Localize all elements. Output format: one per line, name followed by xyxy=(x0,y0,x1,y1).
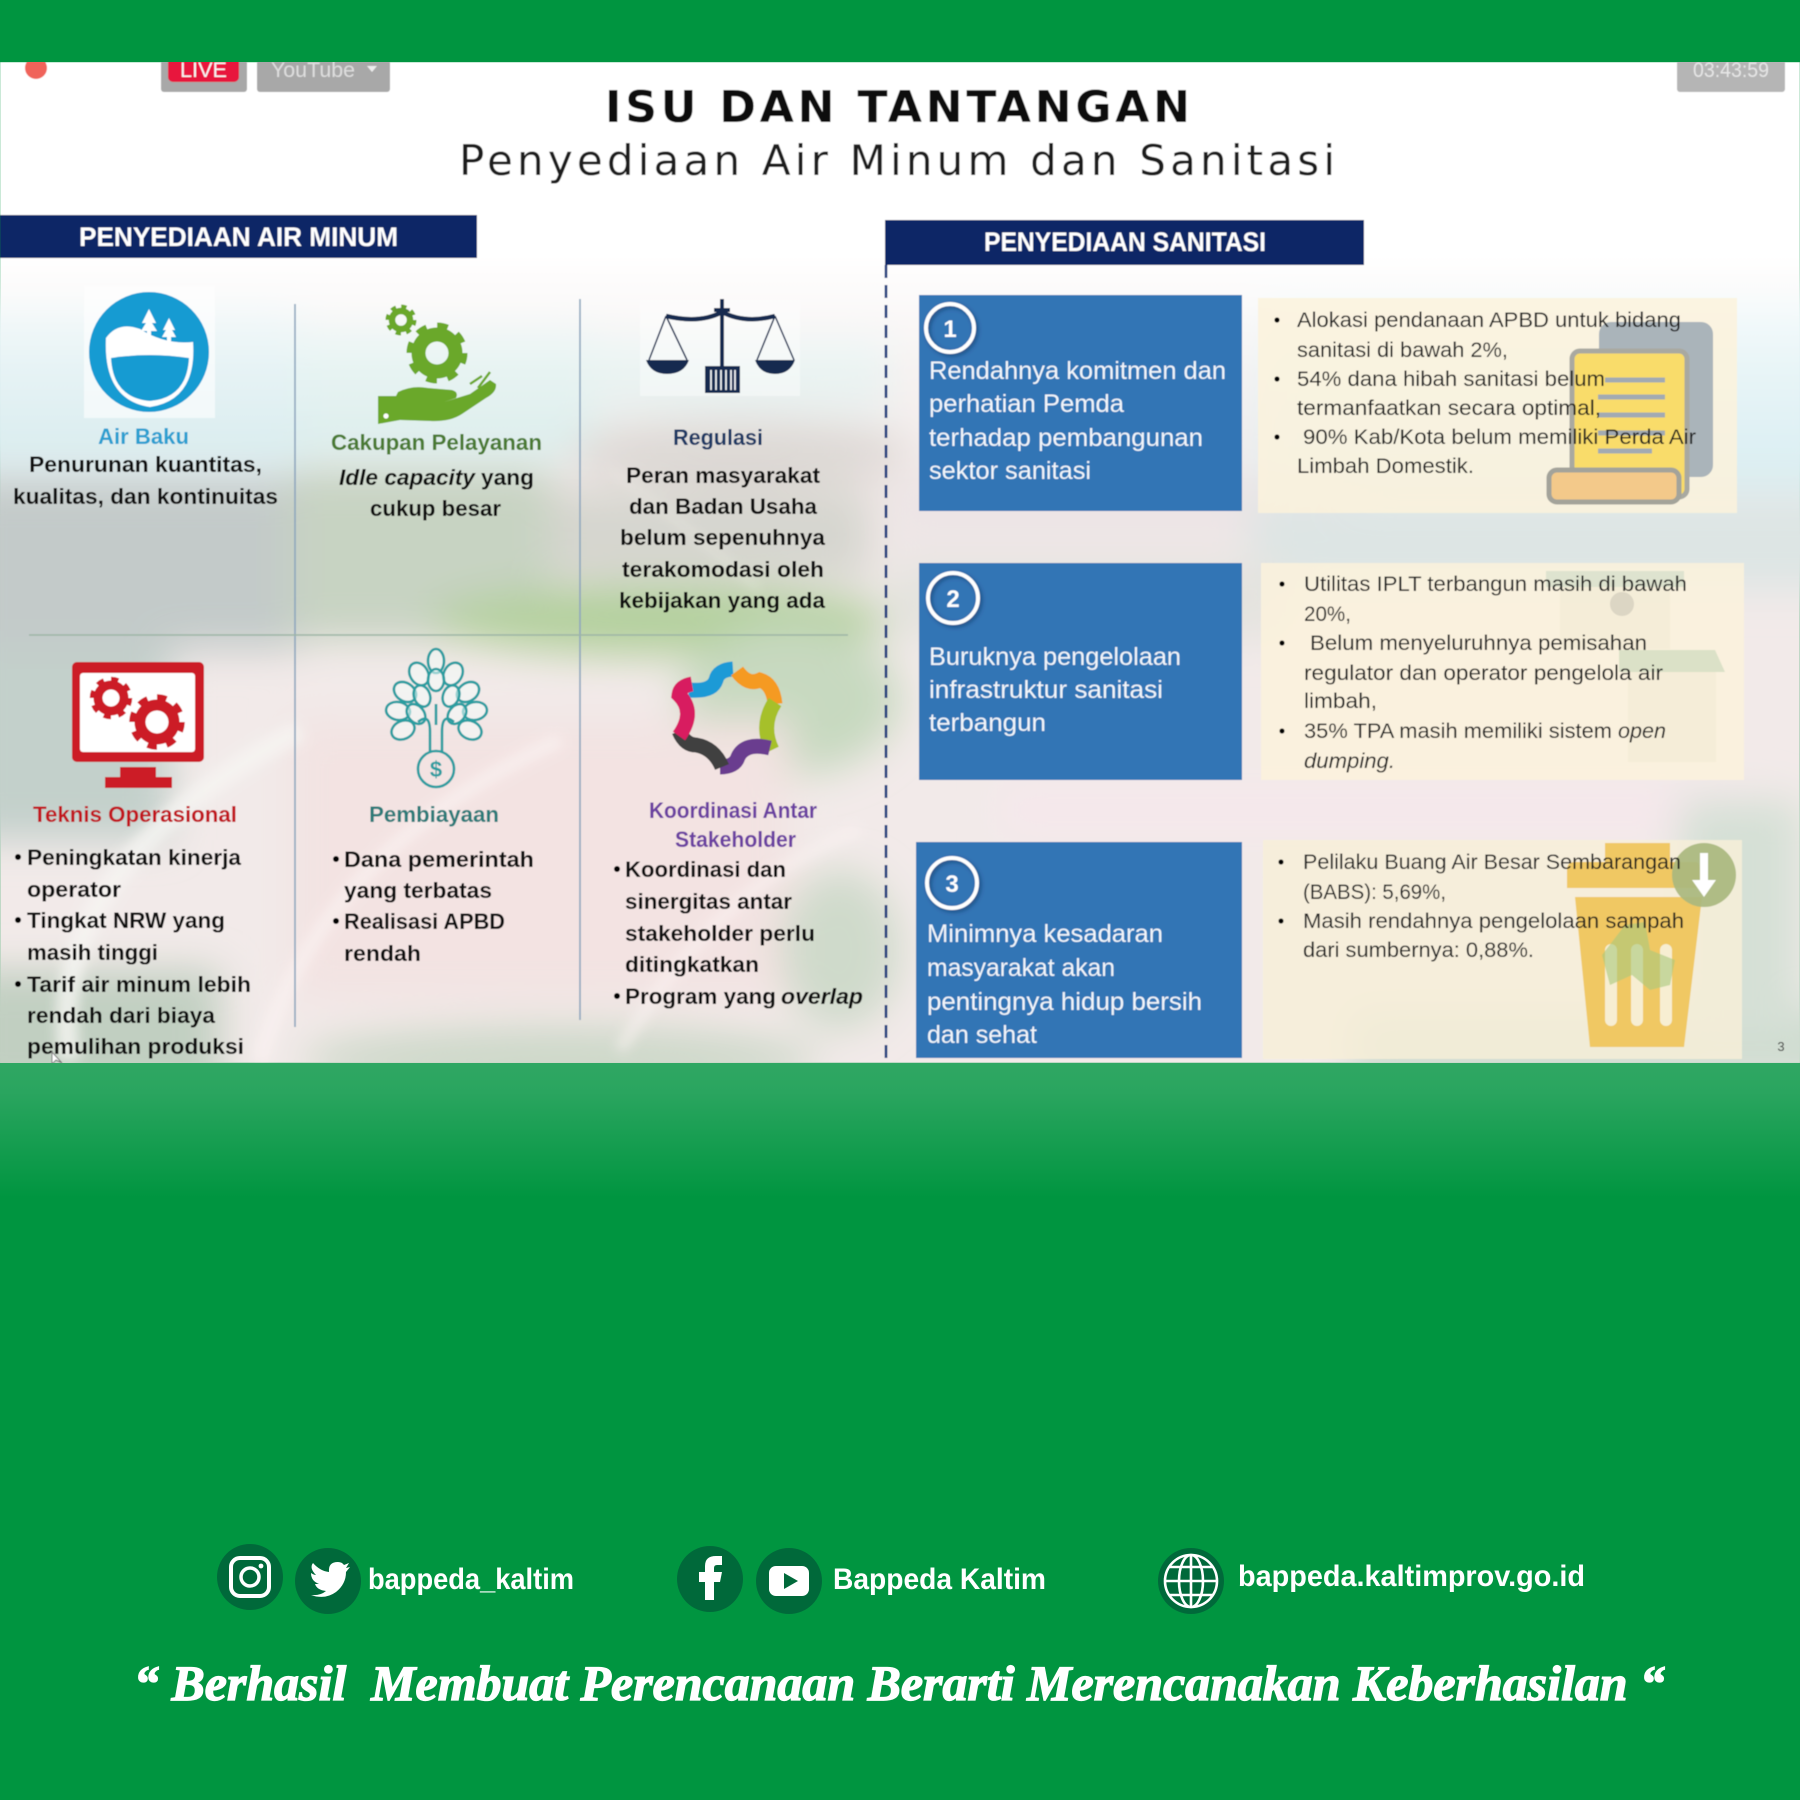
lower green gradient band xyxy=(0,1063,1800,1198)
icon: recycling bin xyxy=(1567,843,1702,1047)
item: regulasi xyxy=(619,299,825,613)
text: idle capacity: Idle capacity xyxy=(339,465,476,490)
item: koordinasi antar stakeholder: sinergitas antar xyxy=(625,889,792,914)
item: teknis operasional xyxy=(15,662,251,1059)
icon: document scroll xyxy=(1549,322,1713,502)
text: idle capacity xyxy=(339,465,534,521)
icon: money tree: $ xyxy=(430,757,442,782)
item: koordinasi antar stakeholder: overlap xyxy=(781,984,863,1009)
number badge 3 xyxy=(927,858,977,908)
issue 1 detail: Alokasi pendanaan APBD untuk bidang xyxy=(1297,308,1681,332)
item: pembiayaan: Dana pemerintah xyxy=(344,847,534,872)
issue 1 box: perhatian Pemda xyxy=(929,390,1124,418)
item title: Stakeholder xyxy=(675,827,796,852)
item: teknis operasional: rendah dari biaya xyxy=(27,1003,215,1028)
website url: bappeda.kaltimprov.go.id xyxy=(1238,1560,1585,1593)
heading bar: PENYEDIAAN AIR MINUM xyxy=(79,222,398,252)
mouse cursor xyxy=(52,1052,62,1064)
recording indicator xyxy=(24,62,48,80)
item: teknis operasional: Tingkat NRW yang xyxy=(27,908,225,933)
issue 3 box: pentingnya hidup bersih xyxy=(927,988,1202,1016)
heading bar: PENYEDIAAN SANITASI xyxy=(984,227,1266,257)
item: air baku: Air Baku xyxy=(98,424,189,449)
item: teknis operasional: Teknis Operasional xyxy=(33,802,237,827)
issue 2 detail: 20%, xyxy=(1304,602,1351,626)
item: air baku xyxy=(13,286,278,509)
issue 2 detail: Belum menyeluruhnya pemisahan xyxy=(1310,631,1647,655)
number badge 2: 2 xyxy=(946,586,960,613)
issue 2 detail: 35% TPA masih memiliki sistem xyxy=(1304,719,1612,743)
text: idle capacity: cukup besar xyxy=(370,496,501,521)
icon: youtube xyxy=(756,1548,822,1614)
item: pembiayaan: Realisasi APBD xyxy=(344,909,505,934)
item title xyxy=(650,802,818,848)
issue 1 detail: termanfaatkan secara optimal, xyxy=(1297,396,1601,420)
item: teknis operasional: masih tinggi xyxy=(27,940,158,965)
issue 2 box: terbangun xyxy=(929,709,1046,737)
icon: monitor with gears xyxy=(72,662,204,788)
issue 1 box: sektor sanitasi xyxy=(929,457,1091,485)
issue 1 box: terhadap pembangunan xyxy=(929,424,1203,452)
item: regulasi: kebijakan yang ada xyxy=(619,588,825,613)
issue 2 detail: limbah, xyxy=(1304,689,1377,713)
issue 2 box: infrastruktur sanitasi xyxy=(929,676,1163,704)
item: teknis operasional: pemulihan produksi xyxy=(27,1034,244,1059)
icon: scroll-down button xyxy=(1672,843,1736,907)
icon: faint toilet xyxy=(1546,571,1725,762)
live tab: LIVE xyxy=(180,59,227,82)
number badge 2 xyxy=(928,573,978,623)
issue 1 detail: Limbah Domestik. xyxy=(1297,454,1474,478)
issue 2 box xyxy=(919,563,1242,780)
item: pembiayaan: Pembiayaan xyxy=(369,802,499,827)
panel: penyediaan sanitasi xyxy=(885,220,1744,1059)
item: teknis operasional: operator xyxy=(27,877,121,902)
heading bar xyxy=(0,215,477,258)
issue 1 box: Rendahnya komitmen dan xyxy=(929,357,1226,385)
icon: facebook xyxy=(677,1546,743,1612)
title xyxy=(459,82,1335,185)
issue 2 detail: dumping. xyxy=(1304,749,1395,773)
page number: 3 xyxy=(1777,1039,1785,1054)
item: koordinasi antar stakeholder: stakeholder perlu xyxy=(625,921,815,946)
issue 2 detail: open xyxy=(1618,719,1666,743)
item: air baku: kualitas, dan kontinuitas xyxy=(13,484,278,509)
timer: 03:43:59 xyxy=(1693,59,1769,82)
issue 1 detail: 54% dana hibah sanitasi belum xyxy=(1297,367,1605,391)
issue 3 box: Minimnya kesadaran xyxy=(927,920,1163,948)
slide screenshot xyxy=(0,50,1800,1100)
issue 1 detail: 90% Kab/Kota belum memiliki Perda Air xyxy=(1303,425,1696,449)
item: regulasi: terakomodasi oleh xyxy=(622,557,824,582)
issue 3 box: dan sehat xyxy=(927,1021,1037,1049)
issue 2 box: Buruknya pengelolaan xyxy=(929,643,1181,671)
icon: money tree xyxy=(385,649,488,787)
item: cakupan pelayanan xyxy=(331,306,542,521)
issue 1 detail xyxy=(1258,298,1737,513)
heading bar xyxy=(885,220,1364,265)
text: idle capacity: yang xyxy=(481,465,534,490)
item: air baku: Penurunan kuantitas, xyxy=(29,452,262,477)
item: koordinasi antar stakeholder: Koordinasi dan xyxy=(625,857,786,882)
issue 1 box xyxy=(919,295,1242,511)
issue 3 detail: dari sumbernya: 0,88%. xyxy=(1303,938,1534,962)
panel: penyediaan air minum xyxy=(0,215,863,1059)
icon: scales xyxy=(640,299,800,396)
icon: twitter xyxy=(295,1548,361,1614)
handle: bappeda kaltim: Bappeda Kaltim xyxy=(833,1563,1046,1596)
live tab xyxy=(160,62,248,92)
issue 3 box: masyarakat akan xyxy=(927,954,1115,982)
icon: globe xyxy=(1158,1548,1224,1614)
icon: instagram xyxy=(217,1544,283,1610)
item: pembiayaan xyxy=(333,649,534,966)
icon: gears and hand xyxy=(378,306,496,424)
top green band xyxy=(0,0,1800,62)
social links xyxy=(217,1544,1585,1614)
item: regulasi: Peran masyarakat xyxy=(626,463,821,488)
issue 3 detail: Masih rendahnya pengelolaan sampah xyxy=(1303,909,1684,933)
issue 2 detail: Utilitas IPLT terbangun masih di bawah xyxy=(1304,572,1687,596)
item: pembiayaan: rendah xyxy=(344,941,421,966)
item: koordinasi antar stakeholder xyxy=(614,669,863,1009)
icon: coloured gear ring xyxy=(679,669,775,767)
item: cakupan pelayanan: Cakupan Pelayanan xyxy=(331,430,542,455)
item: koordinasi antar stakeholder: ditingkatkan xyxy=(625,952,759,977)
issue 2 detail xyxy=(1261,563,1744,780)
issue 1 detail: sanitasi di bawah 2%, xyxy=(1297,338,1508,362)
issue 2 detail: regulator dan operator pengelola air xyxy=(1304,661,1663,685)
icon: water source xyxy=(84,286,215,418)
aerial photo background xyxy=(0,62,1800,1100)
number badge 3: 3 xyxy=(945,871,959,898)
timer xyxy=(1676,62,1786,92)
item: teknis operasional: Tarif air minum lebih xyxy=(27,972,251,997)
item: koordinasi antar stakeholder: Program yang xyxy=(625,984,776,1009)
issue 3 detail: (BABS): 5,69%, xyxy=(1303,880,1446,904)
item: regulasi: Regulasi xyxy=(673,425,763,450)
number badge 1 xyxy=(926,304,974,352)
issue 3 detail xyxy=(1263,840,1742,1059)
item: regulasi: belum sepenuhnya xyxy=(620,525,825,550)
item: pembiayaan: yang terbatas xyxy=(344,878,492,903)
handle: bappeda_kaltim: bappeda_kaltim xyxy=(368,1563,574,1596)
title: ISU DAN TANTANGAN xyxy=(605,82,1190,133)
item: teknis operasional: Peningkatan kinerja xyxy=(27,845,241,870)
youtube tab: YouTube xyxy=(271,59,355,82)
item: regulasi: dan Badan Usaha xyxy=(629,494,817,519)
issue 3 detail: Pelilaku Buang Air Besar Sembarangan xyxy=(1303,850,1681,874)
youtube tab xyxy=(256,62,390,92)
slogan: “ Berhasil Membuat Perencanaan Berarti Merencanakan Keberhasilan “ xyxy=(134,1655,1665,1711)
number badge 1: 1 xyxy=(943,316,957,343)
issue 3 box xyxy=(916,842,1242,1058)
title: Penyediaan Air Minum dan Sanitasi xyxy=(459,136,1335,185)
item title: Koordinasi Antar xyxy=(649,798,817,823)
